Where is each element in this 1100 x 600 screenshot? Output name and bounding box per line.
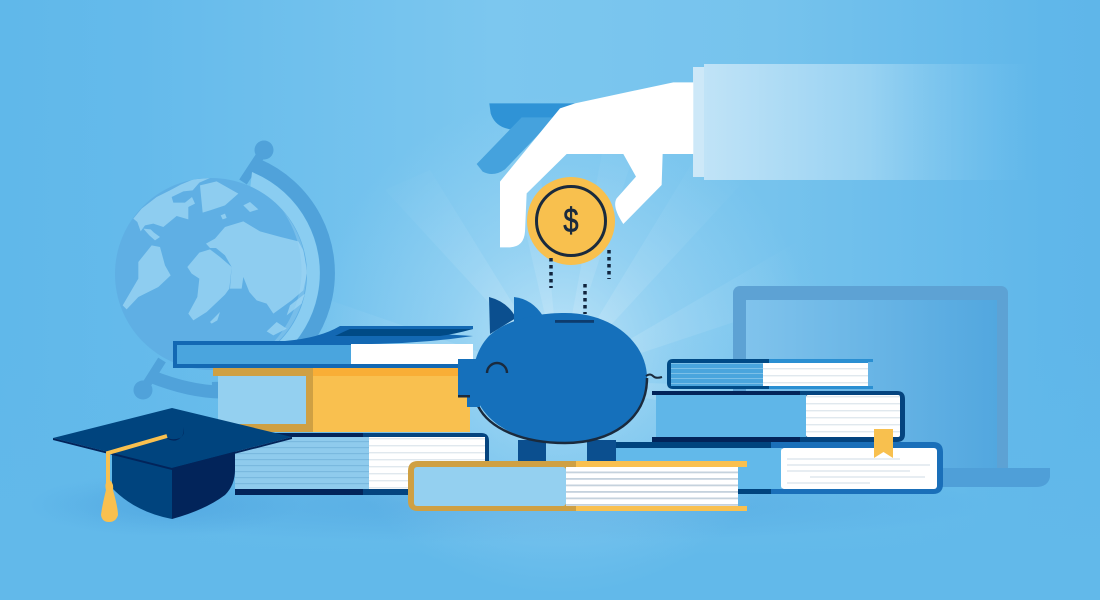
ears	[489, 297, 516, 334]
globe	[115, 140, 327, 400]
globe sphere	[115, 178, 307, 370]
back fingers	[489, 103, 575, 129]
book: bottom left stack	[235, 433, 489, 495]
continents	[123, 178, 307, 335]
tail	[646, 374, 662, 378]
cuff	[693, 67, 704, 177]
laptop	[733, 286, 1050, 487]
cap base	[112, 450, 172, 519]
button	[166, 427, 184, 441]
falling dotted lines	[551, 250, 609, 314]
book: top left, open cover	[173, 326, 473, 368]
coin slot	[555, 320, 594, 323]
book: middle right	[652, 391, 905, 442]
piggy bank	[458, 297, 662, 461]
sleeve	[693, 64, 1034, 180]
floor shadow	[30, 467, 990, 543]
bookmark	[874, 429, 893, 458]
tassel cord	[108, 436, 167, 486]
coin	[527, 177, 615, 265]
book: small top right	[667, 359, 873, 389]
tassel	[101, 480, 118, 522]
book: yellow	[213, 368, 470, 432]
eye	[487, 363, 507, 373]
globe shade	[250, 211, 306, 361]
body	[473, 313, 647, 443]
dollar sign: $	[563, 201, 579, 240]
globe stand arm	[134, 140, 327, 400]
legs	[518, 440, 546, 461]
light rays behind the piggy bank	[290, 95, 850, 595]
graduation cap	[53, 408, 292, 522]
white hand	[500, 82, 693, 247]
book: large blue	[610, 442, 943, 494]
belly outline	[478, 378, 647, 443]
hand dropping a coin	[477, 82, 693, 247]
snout	[458, 359, 480, 407]
book: front yellow	[408, 461, 747, 511]
mortarboard	[53, 408, 292, 468]
